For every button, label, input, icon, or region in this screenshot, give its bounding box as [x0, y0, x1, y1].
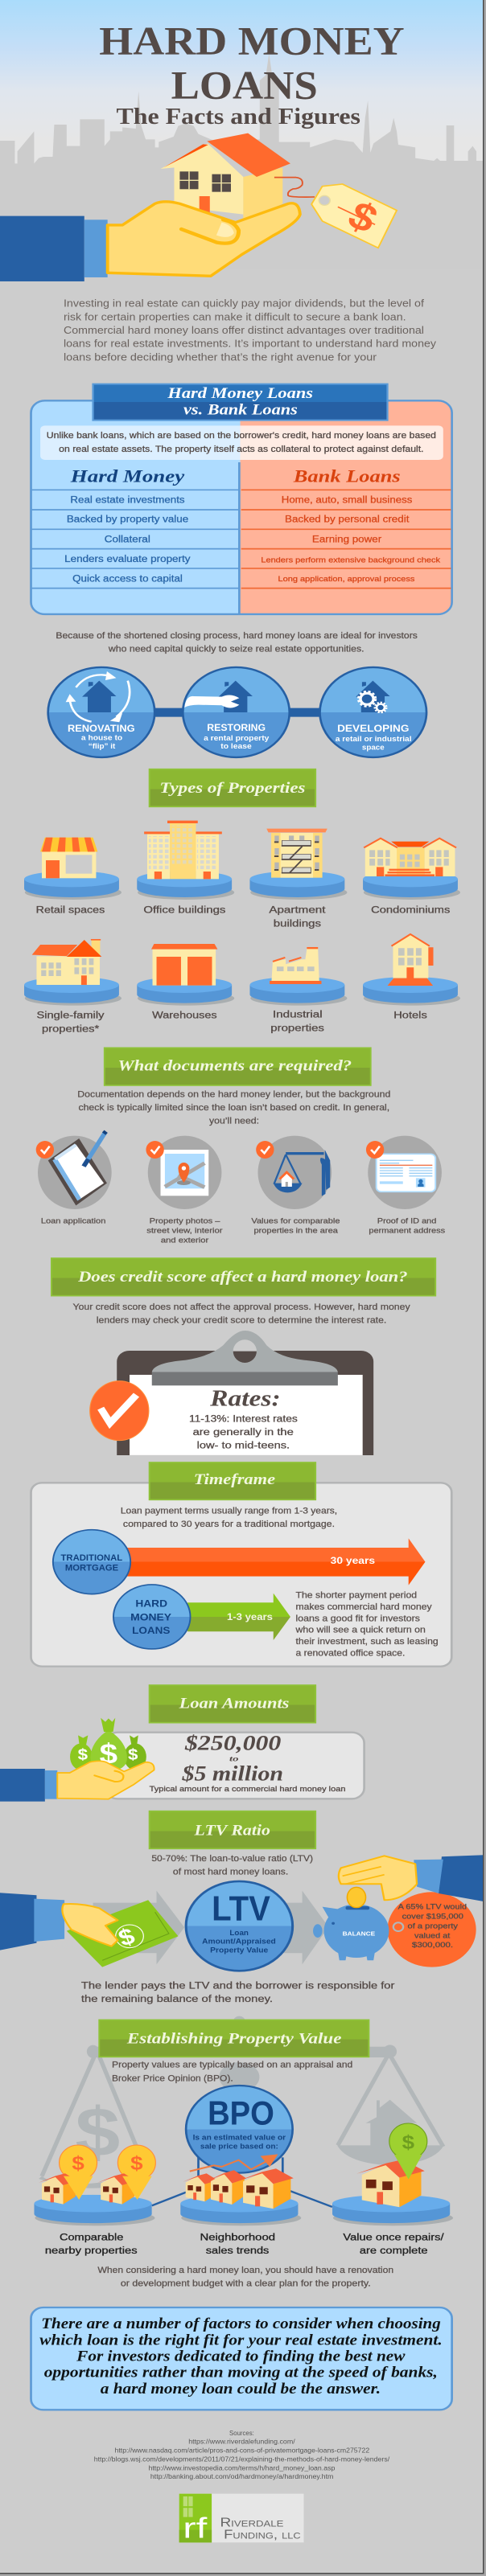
text: terms: compared to 30 years for a traditional mortgage.	[123, 1520, 335, 1529]
circle: LTV	[186, 1881, 293, 1971]
column: comparable nearby properties	[34, 2145, 155, 2256]
property: single-family: properties*	[42, 1023, 99, 1034]
document: comparable values: properties in the area	[253, 1227, 338, 1235]
column: bank loans: Bank Loans	[293, 466, 401, 486]
document: comparable values	[251, 1136, 340, 1235]
column: neighborhood sales trends: Neighborhood	[200, 2231, 275, 2242]
property: industrial	[249, 947, 347, 1033]
circle: restoring: RESTORING	[207, 722, 266, 733]
text: shorter payment period: The shorter payment period	[295, 1591, 417, 1600]
text: closing process: who need capital quickly to seize real estate opportunities.	[108, 643, 364, 654]
column: hard money: Real estate investments	[70, 494, 185, 505]
property: warehouses: Warehouses	[152, 1009, 217, 1020]
heading: what documents are required: What documents are required?	[117, 1056, 352, 1074]
heading: timeframe	[150, 1462, 315, 1499]
property: warehouses	[137, 944, 234, 1020]
circle: traditional mortgage: MORTGAGE	[65, 1564, 118, 1573]
text: closing process: Because of the shortened closing process, hard money loans are ideal for investors	[56, 630, 418, 641]
property: apartment buildings: Apartment	[269, 904, 326, 915]
icon: hand with cash	[0, 1893, 178, 1967]
circle: hard money loans: HARD	[135, 1598, 167, 1609]
document: proof of ID: permanent address	[369, 1227, 445, 1235]
column: comparable nearby properties: $	[130, 2153, 143, 2174]
circle: restoring: to lease	[220, 743, 252, 751]
document: proof of ID	[366, 1136, 445, 1235]
text: terms: Loan payment terms usually range from 1-3 years,	[121, 1507, 337, 1516]
header section	[0, 0, 484, 363]
document: loan application	[36, 1131, 112, 1225]
callout: loan amount range: $250,000	[184, 1732, 281, 1755]
documents section	[36, 1089, 445, 1455]
icon: hand with cash: $	[115, 1923, 138, 1951]
text: LTV definition	[151, 1855, 313, 1877]
text: remaining balance: the remaining balance of the money.	[81, 1993, 273, 2004]
chain connectors	[154, 708, 321, 717]
column: comparable nearby properties: Comparable	[60, 2231, 123, 2242]
column: bank loans: Home, auto, small business	[282, 494, 413, 505]
clipboard: rates: Rates:	[209, 1385, 281, 1411]
callout: loan amount range	[105, 1732, 364, 1799]
rates and timeframe section	[31, 1413, 451, 1667]
text: documentation: Documentation depends on the hard money lender, but the background	[77, 1089, 391, 1099]
property: retail spaces	[24, 838, 122, 915]
callout: 65 percent example: cover $195,000	[402, 1913, 463, 1921]
arrow: 1-3 years	[187, 1594, 290, 1640]
text: LTV definition: 50-70%: The loan-to-value ratio (LTV)	[151, 1855, 313, 1864]
arrow: lender to LTV	[93, 1891, 184, 1964]
circle: developing: a retail or industrial	[336, 736, 412, 744]
sources: http://www.investopedia.com/terms/h/hard_money_loan.asp	[149, 2464, 335, 2471]
text: closing process	[56, 630, 418, 654]
sources: Sources:	[229, 2430, 254, 2437]
document: property photos	[146, 1136, 223, 1245]
icon: piggy bank balance: BALANCE	[343, 1930, 375, 1937]
icon: house in hand with price tag: $	[340, 194, 385, 242]
panel: conclusion: a hard money loan could be the answer.	[101, 2379, 381, 2398]
circle: hard money loans	[113, 1585, 191, 1649]
column: value once repairs are complete: Value once repairs/	[343, 2231, 444, 2242]
document: loan application: Loan application	[41, 1217, 105, 1225]
document: proof of ID: Proof of ID and	[377, 1217, 436, 1225]
circle: LTV: Loan	[229, 1930, 249, 1938]
text: shorter payment period	[294, 1591, 439, 1658]
property value section	[34, 1993, 453, 2288]
circle: restoring: a rental property	[204, 735, 270, 743]
column: comparable nearby properties: $	[72, 2153, 84, 2174]
heading: credit score	[51, 1258, 435, 1296]
column: hard money: Hard Money	[70, 466, 184, 486]
title: HARD MONEY	[99, 18, 405, 64]
property: apartment buildings: buildings	[274, 917, 322, 929]
heading: LTV ratio	[150, 1811, 315, 1848]
property: industrial: properties	[270, 1023, 325, 1033]
sources	[94, 2430, 390, 2480]
logo: Riverdale Funding: Funding, llc	[224, 2526, 301, 2541]
circle: hard money loans: MONEY	[130, 1611, 171, 1622]
text: shorter payment period: who will see a quick return on	[294, 1626, 426, 1635]
document: comparable values: Values for comparable	[251, 1217, 340, 1225]
circle: restoring	[183, 667, 290, 757]
panel: conclusion: opportunities rather than moving at the speed of banks,	[44, 2363, 438, 2381]
text: property values: Property values are typically based on an appraisal and	[112, 2061, 352, 2069]
callout: 65 percent example: A 65% LTV would	[398, 1903, 467, 1911]
rates text: low- to mid-teens.	[197, 1440, 290, 1450]
circle: LTV: LTV	[212, 1889, 270, 1928]
sky background	[0, 0, 484, 166]
text: shorter payment period: makes commercial hard money	[295, 1603, 432, 1612]
circle: traditional mortgage	[53, 1530, 130, 1594]
icon: hand dropping coin	[339, 1855, 484, 1901]
property: condominiums	[363, 839, 460, 915]
property: retail spaces: Retail spaces	[36, 904, 105, 915]
callout: 65 percent example: of a property	[408, 1922, 459, 1930]
heading: loan amounts	[150, 1685, 315, 1723]
icon: hand with money bags: $	[128, 1746, 138, 1763]
comparison section	[31, 384, 452, 757]
property: single-family	[24, 939, 122, 1034]
panel: conclusion: There are a number of factors to consider when choosing	[41, 2314, 441, 2332]
property: apartment buildings	[249, 829, 347, 929]
text: credit score	[73, 1302, 410, 1325]
icon: background balance scale	[39, 2016, 444, 2188]
column: value once repairs are complete: $	[402, 2132, 415, 2153]
text: credit score: lenders may check your credit score to determine the interest rate.	[97, 1315, 386, 1325]
heading banner: vs. Bank Loans	[183, 400, 298, 418]
callout: 65 percent example: $300,000.	[412, 1942, 453, 1950]
circle: developing: DEVELOPING	[337, 723, 409, 734]
column: hard money: Collateral	[105, 534, 150, 544]
column: hard money: Lenders evaluate property	[64, 553, 191, 564]
icon: hand with money bags: $	[78, 1746, 88, 1763]
column: bank loans: Earning power	[312, 534, 382, 544]
heading banner	[93, 384, 388, 420]
text: shorter payment period: their investment, such as leasing	[295, 1638, 439, 1647]
intro paragraph: Investing in real estate can quickly pay major dividends, but the level of	[64, 298, 424, 309]
properties section	[24, 769, 460, 1085]
property: office buildings: Office buildings	[143, 904, 226, 915]
text: renovation budget: or development budget with a clear plan for the property.	[121, 2279, 371, 2288]
logo: Riverdale Funding: Riverdale	[220, 2515, 283, 2529]
heading: loan amounts: Loan Amounts	[179, 1694, 289, 1712]
comparison intro: on real estate assets. The property itself acts as collateral to protect against default.	[59, 444, 424, 454]
circle: renovating: a house to	[81, 734, 122, 742]
rates text: 11-13%: Interest rates	[189, 1413, 298, 1424]
sources: http://banking.about.com/od/hardmoney/a/hardmoney.htm	[150, 2473, 333, 2480]
icon: hand with money bags: $	[100, 1739, 117, 1770]
column: value once repairs are complete	[332, 2123, 453, 2256]
arrow: 1-3 years: 1-3 years	[227, 1611, 273, 1622]
property: industrial: Industrial	[273, 1009, 323, 1019]
panel: hard money vs bank loans table	[31, 384, 452, 614]
column: neighborhood sales trends: sales trends	[206, 2245, 270, 2256]
subtitle: The Facts and Figures	[116, 103, 360, 129]
comparison intro: Unlike bank loans, which are based on the borrower's credit, hard money loans are based	[47, 430, 436, 441]
text: property values: Broker Price Opinion (BPO).	[112, 2074, 233, 2083]
text: terms	[121, 1507, 337, 1529]
circle: BPO	[186, 2086, 293, 2173]
text: shorter payment period: a renovated office space.	[295, 1649, 405, 1658]
heading banner: Hard Money Loans	[167, 384, 313, 402]
text: documentation: check is typically limited since the loan isn’t based on credit. In general,	[78, 1102, 389, 1113]
logo: Riverdale Funding: rf	[183, 2512, 208, 2545]
panel: conclusion: For investors dedicated to finding the best new	[76, 2347, 406, 2365]
circle: LTV: Amount/Appraised	[202, 1938, 276, 1946]
circle: traditional mortgage: TRADITIONAL	[60, 1554, 122, 1563]
document: property photos: and exterior	[161, 1237, 209, 1245]
column: hard money	[64, 466, 191, 584]
property: office buildings	[137, 821, 234, 915]
intro paragraph: loans before deciding whether that’s the right avenue for your	[64, 351, 377, 363]
text: renovation budget	[97, 2266, 393, 2288]
heading: timeframe: Timeframe	[194, 1470, 275, 1488]
intro paragraph: loans for real estate investments. It’s important to understand hard money	[64, 338, 436, 349]
text: lender pays: The lender pays the LTV and the borrower is responsible for	[81, 1979, 395, 1991]
heading: establishing property value: Establishing Property Value	[126, 2029, 341, 2047]
heading: establishing property value	[99, 2020, 369, 2057]
logo: Riverdale Funding	[179, 2494, 303, 2545]
property: hotels: Hotels	[393, 1009, 427, 1020]
arrow: LTV to balance	[279, 1891, 328, 1964]
loan amounts and LTV section	[0, 1685, 484, 1991]
heading: types of properties	[150, 769, 315, 806]
title	[99, 18, 405, 107]
column: hard money: Quick access to capital	[72, 573, 183, 584]
circle: renovating: RENOVATING	[68, 723, 135, 734]
sources: http://www.nasdaq.com/article/pros-and-cons-of-privatemortgage-loans-cm275722	[115, 2447, 369, 2454]
arrow: 30 years	[127, 1538, 425, 1585]
circle: BPO: sale price based on:	[200, 2143, 278, 2151]
comparison intro	[47, 430, 436, 454]
column: bank loans: Lenders perform extensive background check	[261, 556, 441, 564]
intro paragraph	[64, 298, 436, 363]
text: documentation: you’ll need:	[209, 1115, 259, 1126]
callout: loan amount range: $5 million	[181, 1762, 283, 1786]
intro paragraph: risk for certain properties can make it difficult to secure a bank loan.	[64, 311, 406, 322]
column: neighborhood sales trends	[180, 2154, 301, 2256]
clipboard: rates	[90, 1331, 373, 1455]
intro paragraph: Commercial hard money loans offer distinct advantages over traditional	[64, 325, 424, 336]
circle: developing	[320, 667, 426, 757]
title: LOANS	[171, 63, 318, 107]
text: renovation budget: When considering a hard money loan, you should have a renovation	[97, 2266, 393, 2275]
circle: hard money loans: LOANS	[132, 1625, 171, 1636]
panel: conclusion	[31, 2307, 452, 2410]
heading: LTV ratio: LTV Ratio	[193, 1821, 270, 1839]
callout: 65 percent example	[388, 1892, 476, 1967]
column: bank loans: Backed by personal credit	[285, 514, 410, 524]
callout: 65 percent example: valued at	[414, 1932, 451, 1940]
connecting lines	[152, 2157, 332, 2207]
circle: developing: space	[362, 744, 385, 752]
column: comparable nearby properties: nearby properties	[45, 2245, 138, 2256]
icon: piggy bank balance	[313, 1887, 389, 1960]
property: single-family: Single-family	[36, 1009, 105, 1020]
icon: background balance scale: $	[75, 2093, 120, 2171]
column: hard money: Backed by property value	[67, 514, 188, 524]
panel: timeframe	[31, 1462, 451, 1667]
document: property photos: Property photos –	[150, 1217, 220, 1225]
circle: BPO: Is an estimated value or	[193, 2134, 286, 2142]
city skyline	[0, 54, 484, 268]
panel: conclusion: which loan is the right fit for your real estate investment.	[39, 2331, 443, 2348]
heading: what documents are required	[105, 1048, 371, 1085]
icon: house in hand with price tag	[0, 133, 397, 281]
sources: http://blogs.wsj.com/developments/2011/07/21/explaining-the-methods-of-hard-money-lenders/	[94, 2455, 390, 2463]
text: property values	[112, 2061, 352, 2083]
rates text	[189, 1413, 298, 1450]
column: value once repairs are complete: are complete	[360, 2245, 428, 2256]
rates text: are generally in the	[193, 1426, 294, 1438]
circle: renovating	[48, 667, 154, 757]
circle: renovating: “flip” it	[89, 743, 116, 751]
column: bank loans	[261, 466, 441, 584]
icon: hand with money bags	[0, 1718, 154, 1802]
text: shorter payment period: loans a good fit for investors	[295, 1614, 420, 1623]
heading: credit score: Does credit score affect a hard money loan?	[77, 1267, 408, 1286]
circle: BPO: BPO	[208, 2094, 274, 2132]
circle: LTV: Property Value	[210, 1946, 269, 1955]
heading: types of properties: Types of Properties	[159, 778, 305, 797]
sources: https://www.riverdalefunding.com/	[188, 2438, 295, 2445]
conclusion and footer section	[31, 2307, 452, 2545]
callout: loan amount range: Typical amount for a commercial hard money loan	[150, 1786, 345, 1794]
column: bank loans: Long application, approval process	[278, 576, 414, 584]
arrow: 30 years: 30 years	[331, 1555, 375, 1566]
document: property photos: street view, interior	[146, 1227, 223, 1235]
text: LTV definition: of most hard money loans.	[173, 1868, 288, 1877]
text: credit score: Your credit score does not affect the approval process. However, hard money	[73, 1302, 410, 1312]
text: documentation	[77, 1089, 391, 1126]
property: hotels	[363, 934, 460, 1020]
property: condominiums: Condominiums	[371, 904, 451, 915]
callout: loan amount range: to	[229, 1755, 239, 1763]
